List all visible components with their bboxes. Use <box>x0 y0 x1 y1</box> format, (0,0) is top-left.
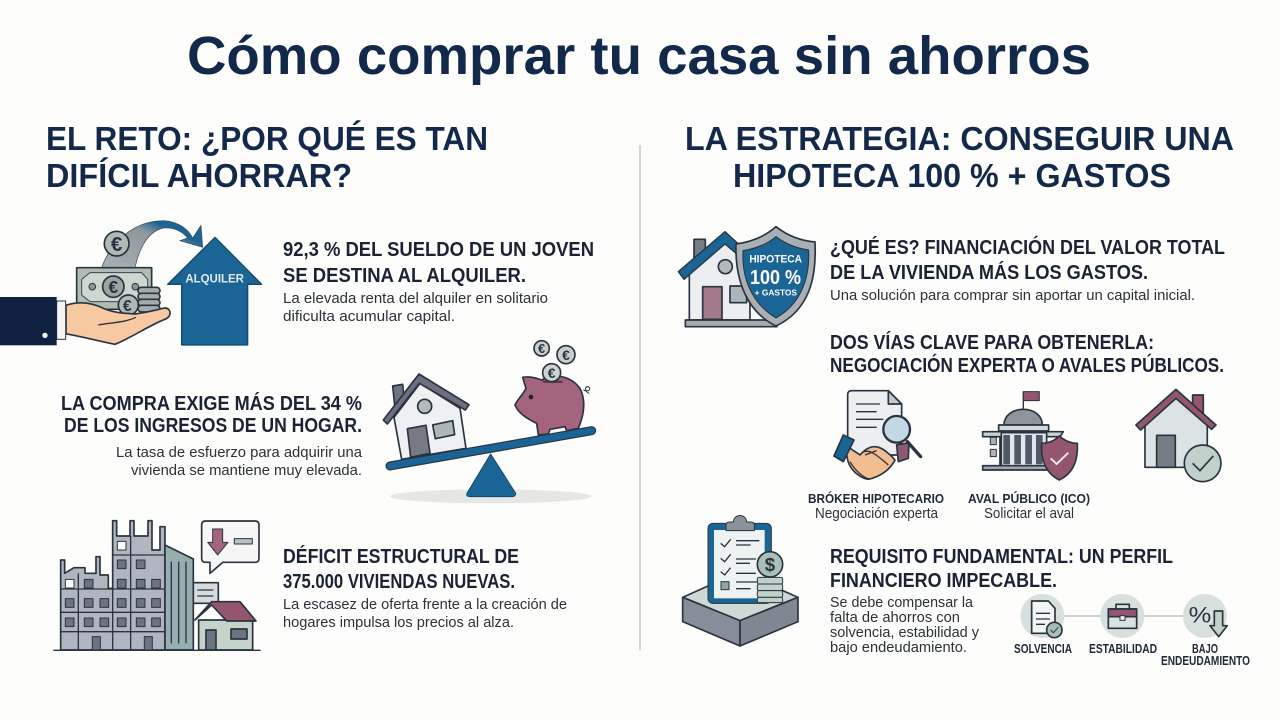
icon: clipboard on a box with coins <box>683 515 798 646</box>
heading: el reto: EL RETO: ¿POR QUÉ ES TAN <box>46 120 488 157</box>
text block: requisito: solvencia, estabilidad y <box>830 625 980 641</box>
heading: la estrategia <box>685 120 1234 194</box>
text block: requisito: Se debe compensar la <box>830 595 974 611</box>
icon: house and piggy bank on a seesaw <box>383 341 592 503</box>
text block: qué es <box>830 235 1225 304</box>
title: Cómo comprar tu casa sin ahorros <box>187 26 1091 86</box>
heading: la estrategia: HIPOTECA 100 % + GASTOS <box>733 157 1171 194</box>
text block: déficit: hogares impulsa los precios al alza. <box>283 615 514 631</box>
text block: dos vías: DOS VÍAS CLAVE PARA OBTENERLA: <box>830 331 1154 354</box>
text block: alquiler: La elevada renta del alquiler en solitario <box>283 291 548 307</box>
text block: requisito: bajo endeudamiento. <box>830 640 967 656</box>
text block: bróker hipotecario: BRÓKER HIPOTECARIO <box>808 491 944 506</box>
icon: bajo endeudamiento <box>1183 594 1227 638</box>
panel: la estrategia <box>678 120 1250 668</box>
labels: requisitos: BAJO <box>1192 642 1218 656</box>
text block: requisito: falta de ahorros con <box>830 610 960 626</box>
text block: alquiler: SE DESTINA AL ALQUILER. <box>283 265 526 287</box>
icon: hand paying rent: ALQUILER <box>185 272 245 285</box>
labels: requisitos: SOLVENCIA <box>1014 642 1072 656</box>
text block: tasa de esfuerzo: LA COMPRA EXIGE MÁS DEL 34 % <box>61 392 362 415</box>
text block: déficit: DÉFICIT ESTRUCTURAL DE <box>283 545 519 568</box>
icon: unfinished buildings with housing deficit <box>53 521 261 650</box>
text block: déficit <box>283 545 567 631</box>
icon: hand paying rent: € <box>123 298 132 315</box>
labels: requisitos <box>1014 642 1250 668</box>
icon: hand paying rent: € <box>111 233 123 256</box>
text block: aval público: AVAL PÚBLICO (ICO) <box>968 491 1090 506</box>
icon: house with mortgage shield: + GASTOS <box>755 288 797 298</box>
text block: tasa de esfuerzo: DE LOS INGRESOS DE UN HOGAR. <box>64 415 362 437</box>
text block: tasa de esfuerzo: La tasa de esfuerzo para adquirir una <box>116 445 363 461</box>
icon: clipboard on a box with coins: $ <box>765 554 776 575</box>
icon: house with check <box>1136 389 1221 482</box>
text block: tasa de esfuerzo: vivienda se mantiene muy elevada. <box>131 463 362 479</box>
heading: la estrategia: LA ESTRATEGIA: CONSEGUIR UNA <box>685 120 1234 157</box>
heading: el reto: DIFÍCIL AHORRAR? <box>46 157 352 194</box>
icon: broker document and handshake <box>834 391 921 479</box>
heading: el reto <box>46 120 488 194</box>
icon: hand paying rent <box>0 221 262 345</box>
text block: requisito: FINANCIERO IMPECABLE. <box>830 570 1057 592</box>
text block: qué es: ¿QUÉ ES? FINANCIACIÓN DEL VALOR TOTAL <box>830 235 1225 259</box>
text block: requisito <box>830 546 1173 656</box>
text block: déficit: La escasez de oferta frente a la creación de <box>283 597 567 613</box>
text block: dos vías <box>830 331 1224 377</box>
labels: requisitos: ESTABILIDAD <box>1089 642 1157 656</box>
text block: alquiler: 92,3 % DEL SUELDO DE UN JOVEN <box>283 239 594 261</box>
text block: aval público: Solicitar el aval <box>984 506 1074 522</box>
icon: bajo endeudamiento: % <box>1189 602 1211 627</box>
text block: aval público <box>968 491 1090 522</box>
text block: qué es: Una solución para comprar sin aportar un capital inicial. <box>830 288 1195 304</box>
text block: bróker hipotecario <box>808 491 944 522</box>
icon: hand paying rent: € <box>109 277 119 297</box>
icon: house with mortgage shield: HIPOTECA <box>749 254 802 266</box>
text block: alquiler <box>283 239 594 325</box>
labels: requisitos: ENDEUDAMIENTO <box>1161 654 1250 668</box>
panel: el reto <box>0 120 594 650</box>
icon: house with mortgage shield <box>678 227 815 327</box>
icon: solvencia <box>1020 594 1064 638</box>
icon: estabilidad <box>1100 594 1144 638</box>
text block: bróker hipotecario: Negociación experta <box>815 506 939 522</box>
text block: requisito: REQUISITO FUNDAMENTAL: UN PERFIL <box>830 546 1173 568</box>
icon: house and piggy bank on a seesaw: € <box>538 342 545 356</box>
icon: house and piggy bank on a seesaw: € <box>562 347 570 363</box>
text block: alquiler: dificulta acumular capital. <box>283 309 455 325</box>
text block: déficit: 375.000 VIVIENDAS NUEVAS. <box>283 571 515 593</box>
text block: qué es: DE LA VIVIENDA MÁS LOS GASTOS. <box>830 261 1148 284</box>
icon: house and piggy bank on a seesaw: € <box>548 365 556 381</box>
text block: tasa de esfuerzo <box>61 392 363 479</box>
text block: dos vías: NEGOCIACIÓN EXPERTA O AVALES PÚBLICOS. <box>830 353 1224 377</box>
icon: public institution with shield <box>983 392 1077 480</box>
icon: house with mortgage shield: 100 % <box>750 267 801 289</box>
